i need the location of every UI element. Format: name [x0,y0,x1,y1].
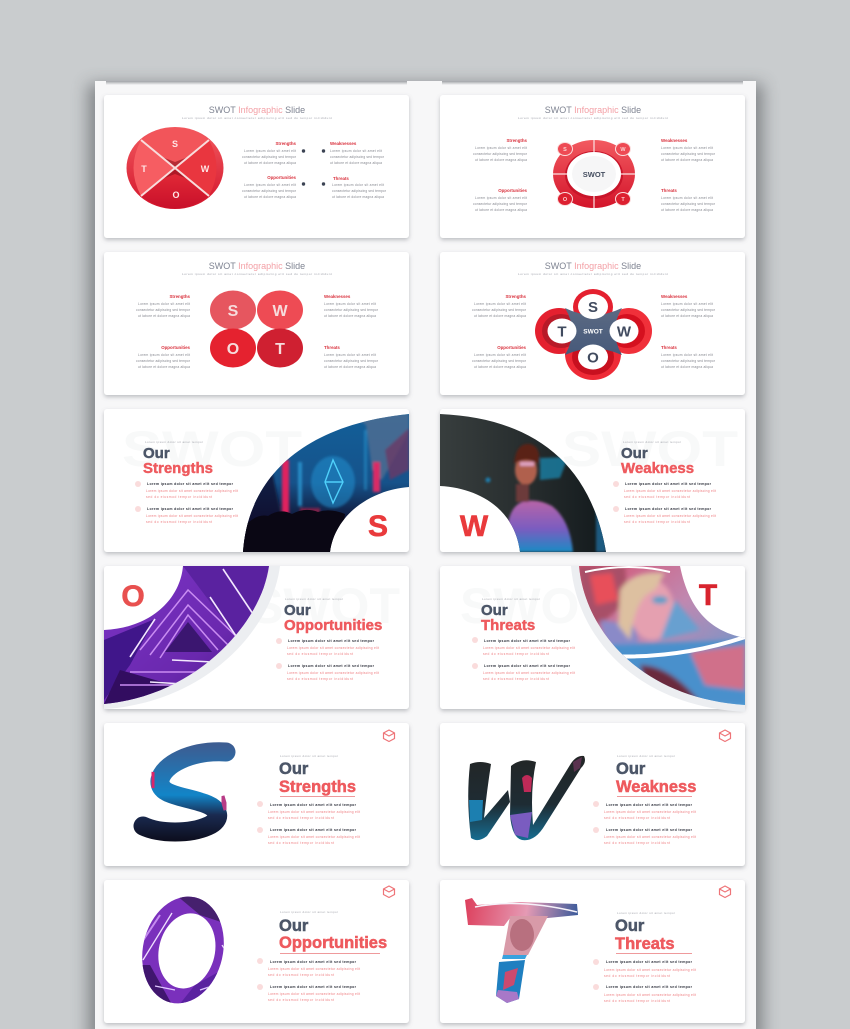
photo: purple neon tunnel [100,562,272,707]
heading: Weakness [621,460,694,477]
text block: threats [661,188,716,212]
pie chart [126,127,224,209]
text block: opportunities: Lorem ipsum dolor sit amet elit [475,196,527,200]
bullet two: Lorem ipsum dolor sit amet consectetur adipiscing elit [624,514,716,518]
bullet one [257,958,360,977]
clover diagram: W [617,324,632,340]
bullet two: sed do eiusmod tempor incididunt [483,677,549,681]
bullet two: sed do eiusmod tempor incididunt [604,841,670,845]
heading: Our [279,760,309,778]
text block: weaknesses: consectetur adipiscing sed tempor [661,308,716,312]
text block: threats: Threats [324,345,340,350]
panel: brush O opportunities slide [104,880,409,1023]
bullet one: sed do eiusmod tempor incididunt [483,652,549,656]
ring diagram: SWOT [583,170,606,179]
ring diagram: O [563,197,568,203]
four circles diagram: W [272,303,288,320]
bullet two [257,984,360,1002]
bullet one: Lorem ipsum dolor sit amet elit sed tempor [606,960,693,964]
heading: Our [143,445,170,462]
clover diagram: S [588,299,598,316]
brush letter W [468,756,585,840]
text block: threats [324,345,379,369]
ring diagram: W [620,147,626,153]
title: SWOT Infographic Slide [545,105,641,115]
pie chart: S [172,139,178,149]
bullet two: sed do eiusmod tempor incididunt [268,998,334,1002]
panel: SWOT ring slide [440,95,745,238]
text block: weaknesses: consectetur adipiscing sed tempor [661,152,716,156]
brush letter O [142,896,224,1004]
text block: opportunities: consectetur adipiscing sed tempor [136,359,191,363]
photo: neon club [240,410,410,555]
photo ring [104,566,280,709]
text block: opportunities: ut labore et dolore magna aliqua [475,208,527,212]
heading [615,917,675,953]
brush letter S [143,745,228,832]
bullet two: Lorem ipsum dolor sit amet elit sed tempor [147,507,234,511]
bullet one [472,637,575,656]
text block: threats: Threats [661,188,677,193]
connector dots [302,149,325,186]
pie chart: O [172,190,180,200]
text block: threats: consectetur adipiscing sed tempor [332,189,387,193]
text block: strengths: Lorem ipsum dolor sit amet elit [474,302,526,306]
text block: weaknesses: Weaknesses [661,294,688,299]
watermark: SWOT [250,578,400,634]
heading: Our [616,760,646,778]
text block: threats: consectetur adipiscing sed tempor [661,359,716,363]
bullet two [135,506,238,524]
ring diagram [553,140,635,208]
text block: weaknesses: Weaknesses [330,141,357,146]
bullet two [472,663,575,681]
text block: strengths: consectetur adipiscing sed tempor [473,152,528,156]
bullet two: Lorem ipsum dolor sit amet consectetur adipiscing elit [268,835,360,839]
icon: cube badge [384,886,394,898]
bullet one: Lorem ipsum dolor sit amet consectetur adipiscing elit [604,810,696,814]
bullet one: Lorem ipsum dolor sit amet consectetur adipiscing elit [604,968,696,972]
photo: man portrait [438,410,608,555]
heading: Threats [615,935,675,953]
bullet two: Lorem ipsum dolor sit amet consectetur adipiscing elit [604,835,696,839]
panel: SWOT pie slide [104,95,409,238]
underline [280,796,355,797]
heading: Our [284,602,311,619]
text block: threats: ut labore et dolore magna aliqua [661,365,713,369]
four circles diagram: S [228,303,239,320]
watermark: SWOT [460,578,610,634]
panel: SWOT four circles slide [104,252,409,395]
bullet two: Lorem ipsum dolor sit amet consectetur adipiscing elit [268,992,360,996]
small label: Lorem ipsum dolor sit amet tempor [617,911,675,915]
clover diagram: O [587,350,599,366]
panel: brush T threats slide [440,880,745,1023]
brush letter T [465,898,578,1003]
bullet one: sed do eiusmod tempor incididunt [287,652,353,656]
photo ring [571,566,745,712]
bullet one: Lorem ipsum dolor sit amet elit sed tempor [606,803,693,807]
small label: Lorem ipsum dolor sit amet tempor [617,754,675,758]
text block: opportunities: Opportunities [267,175,297,180]
text block: strengths: Strengths [506,138,528,143]
text block: strengths [136,294,191,318]
white page sheet [88,81,763,1029]
heading [284,602,382,634]
heading: Strengths [143,460,213,477]
text block: weaknesses [330,141,385,165]
heading [481,602,535,634]
text block: threats: Lorem ipsum dolor sit amet elit [661,196,713,200]
text block: opportunities: Lorem ipsum dolor sit amet elit [474,353,526,357]
bullet two: Lorem ipsum dolor sit amet elit sed tempor [484,664,571,668]
bullet one [276,638,379,656]
subtitle: Lorem ipsum dolor sit amet consectetur adipiscing elit sed do tempor incididunt [182,116,332,120]
underline [616,953,692,954]
bullet two: Lorem ipsum dolor sit amet elit sed tempor [270,828,357,832]
bullet two: sed do eiusmod tempor incididunt [268,841,334,845]
heading [621,445,694,477]
bullet one: Lorem ipsum dolor sit amet elit sed tempor [270,960,357,964]
text block: strengths: ut labore et dolore magna aliqua [475,158,527,162]
text block: strengths: Strengths [506,294,527,299]
text block: threats: Lorem ipsum dolor sit amet elit [661,353,713,357]
subtitle: Lorem ipsum dolor sit amet consectetur adipiscing elit sed do tempor incididunt [182,272,332,276]
title: SWOT Infographic Slide [209,261,305,271]
text block: threats [661,345,716,369]
letter W: W [460,510,489,543]
text block: weaknesses: ut labore et dolore magna aliqua [324,314,376,318]
text block: opportunities: ut labore et dolore magna aliqua [474,365,526,369]
text block: strengths [473,138,528,162]
bullet two [593,984,696,1003]
text block: threats: Lorem ipsum dolor sit amet elit [332,183,384,187]
text block: opportunities [472,345,527,369]
bullet one [613,481,716,499]
title: SWOT Infographic Slide [545,261,641,271]
icon: cube badge [720,730,730,742]
bullet one: Lorem ipsum dolor sit amet consectetur adipiscing elit [268,810,360,814]
text block: opportunities [473,188,528,212]
text block: strengths: Strengths [276,141,297,146]
small label: Lorem ipsum dolor sit amet tempor [280,910,338,914]
bullet two [276,663,379,681]
text block: weaknesses: Weaknesses [324,294,351,299]
bullet two: sed do eiusmod tempor incididunt [604,999,670,1003]
text block: weaknesses: Lorem ipsum dolor sit amet elit [324,302,376,306]
bullet two: sed do eiusmod tempor incididunt [624,520,690,524]
heading: Our [279,917,309,935]
text block: threats: consectetur adipiscing sed tempor [661,202,716,206]
text block: weaknesses: ut labore et dolore magna aliqua [330,161,382,165]
letter T: T [699,579,717,612]
text block: threats: ut labore et dolore magna aliqua [324,365,376,369]
heading: Opportunities [279,934,387,952]
text block: weaknesses [661,138,716,162]
text block: opportunities: Lorem ipsum dolor sit amet elit [138,353,190,357]
panel: brush S strengths slide [104,723,409,866]
text block: weaknesses: ut labore et dolore magna aliqua [661,314,713,318]
text block: opportunities [242,175,297,199]
heading [143,445,213,477]
ring diagram: S [563,147,567,153]
four circles diagram: O [227,341,239,358]
panel: brush W weakness slide [440,723,745,866]
letter O: O [121,580,145,613]
text block: strengths [242,141,297,165]
underline [617,796,692,797]
text block: strengths: consectetur adipiscing sed tempor [472,308,527,312]
title: SWOT Infographic Slide [209,105,305,115]
heading: Weakness [616,778,696,796]
bullet two: Lorem ipsum dolor sit amet consectetur adipiscing elit [287,671,379,675]
text block: opportunities: Lorem ipsum dolor sit amet elit [244,183,296,187]
bullet one: Lorem ipsum dolor sit amet elit sed tempor [147,482,234,486]
bullet one: sed do eiusmod tempor incididunt [604,816,670,820]
text block: strengths: ut labore et dolore magna aliqua [138,314,190,318]
text block: weaknesses [324,294,379,318]
bullet one: sed do eiusmod tempor incididunt [268,973,334,977]
text block: strengths: Lorem ipsum dolor sit amet elit [244,149,296,153]
panel: our threats photo slide [440,562,747,712]
text block: threats [332,176,387,199]
bullet two: sed do eiusmod tempor incididunt [146,520,212,524]
panel: our weakness photo slide [438,409,745,555]
ring diagram: T [621,197,625,203]
pie chart: T [141,164,147,174]
heading: Threats [481,617,535,634]
text block: opportunities: consectetur adipiscing sed tempor [472,359,527,363]
watermark: SWOT [562,421,738,477]
heading: Our [481,602,508,619]
watermark: SWOT [122,421,302,477]
bullet two: Lorem ipsum dolor sit amet elit sed tempor [288,664,375,668]
text block: threats: consectetur adipiscing sed tempor [324,359,379,363]
small label: Lorem ipsum dolor sit amet tempor [623,440,681,444]
text block: strengths: Strengths [170,294,191,299]
text block: weaknesses: ut labore et dolore magna aliqua [661,158,713,162]
bullet one: Lorem ipsum dolor sit amet elit sed tempor [484,639,571,643]
bullet two: sed do eiusmod tempor incididunt [287,677,353,681]
bullet one [593,801,696,820]
text block: opportunities: consectetur adipiscing sed tempor [242,189,297,193]
bullet one: sed do eiusmod tempor incididunt [624,495,690,499]
text block: weaknesses [661,294,716,318]
bullet two: Lorem ipsum dolor sit amet elit sed tempor [606,828,693,832]
bullet one [257,801,360,820]
heading: Our [621,445,648,462]
subtitle: Lorem ipsum dolor sit amet consectetur adipiscing elit sed do tempor incididunt [518,116,668,120]
text block: strengths [472,294,527,318]
bullet one: Lorem ipsum dolor sit amet consectetur adipiscing elit [268,967,360,971]
pie chart: W [201,164,210,174]
panel: our opportunities photo slide [100,562,409,709]
text block: opportunities: consectetur adipiscing sed tempor [473,202,528,206]
text block: strengths: ut labore et dolore magna aliqua [244,161,296,165]
bullet one: sed do eiusmod tempor incididunt [146,495,212,499]
text block: opportunities: Opportunities [161,345,191,350]
subtitle: Lorem ipsum dolor sit amet consectetur adipiscing elit sed do tempor incididunt [518,272,668,276]
text block: threats: Threats [333,176,349,181]
text block: strengths: Lorem ipsum dolor sit amet elit [475,146,527,150]
bullet two: Lorem ipsum dolor sit amet consectetur adipiscing elit [483,671,575,675]
text block: threats: Lorem ipsum dolor sit amet elit [324,353,376,357]
bullet one: Lorem ipsum dolor sit amet elit sed tempor [625,482,712,486]
text block: opportunities: Opportunities [497,345,527,350]
bullet two [613,506,716,524]
text block: strengths: consectetur adipiscing sed tempor [136,308,191,312]
bullet one: Lorem ipsum dolor sit amet consectetur adipiscing elit [483,646,575,650]
text block: threats: ut labore et dolore magna aliqua [332,195,384,199]
text block: weaknesses: Lorem ipsum dolor sit amet elit [661,146,713,150]
photo: woman portrait [575,562,747,708]
text block: opportunities [136,345,191,369]
text block: opportunities: ut labore et dolore magna aliqua [244,195,296,199]
heading [616,760,696,796]
heading [279,760,356,796]
four circles diagram: T [275,341,285,358]
bullet two [593,827,696,845]
heading: Our [615,917,645,935]
bullet one: sed do eiusmod tempor incididunt [604,974,670,978]
bullet one: Lorem ipsum dolor sit amet consectetur adipiscing elit [287,646,379,650]
bullet one: Lorem ipsum dolor sit amet consectetur adipiscing elit [624,489,716,493]
text block: opportunities: ut labore et dolore magna aliqua [138,365,190,369]
text block: weaknesses: Lorem ipsum dolor sit amet elit [661,302,713,306]
clover diagram [535,289,652,380]
letter S: S [368,510,388,543]
text block: threats: ut labore et dolore magna aliqua [661,208,713,212]
text block: strengths: ut labore et dolore magna aliqua [474,314,526,318]
icon: cube badge [384,730,394,742]
bullet one: Lorem ipsum dolor sit amet elit sed tempor [270,803,357,807]
small label: Lorem ipsum dolor sit amet tempor [145,440,203,444]
text block: weaknesses: consectetur adipiscing sed tempor [330,155,385,159]
bullet one: Lorem ipsum dolor sit amet consectetur adipiscing elit [146,489,238,493]
text block: strengths: Lorem ipsum dolor sit amet elit [138,302,190,306]
four circles diagram [210,290,303,368]
heading: Opportunities [284,617,382,634]
text block: opportunities: Opportunities [498,188,528,193]
text block: threats: Threats [661,345,677,350]
icon: cube badge [720,886,730,898]
bullet one: sed do eiusmod tempor incididunt [268,816,334,820]
bullet one [593,959,696,978]
bullet two: Lorem ipsum dolor sit amet elit sed tempor [270,985,357,989]
clover diagram: SWOT [583,328,603,336]
small label: Lorem ipsum dolor sit amet tempor [285,597,343,601]
bullet two: Lorem ipsum dolor sit amet elit sed tempor [606,985,693,989]
bullet two [257,827,360,845]
heading: Strengths [279,778,356,796]
panel: our strengths photo slide [104,409,410,555]
panel: SWOT clover slide [440,252,745,395]
clover diagram: T [557,324,567,340]
bullet two: Lorem ipsum dolor sit amet elit sed tempor [625,507,712,511]
heading [279,917,387,952]
bullet two: Lorem ipsum dolor sit amet consectetur adipiscing elit [604,993,696,997]
text block: weaknesses: Lorem ipsum dolor sit amet elit [330,149,382,153]
underline [280,953,380,954]
text block: weaknesses: Weaknesses [661,138,688,143]
small label: Lorem ipsum dolor sit amet tempor [280,754,338,758]
bullet one [135,481,238,499]
small label: Lorem ipsum dolor sit amet tempor [482,597,540,601]
text block: strengths: consectetur adipiscing sed tempor [242,155,297,159]
bullet one: Lorem ipsum dolor sit amet elit sed tempor [288,639,375,643]
text block: weaknesses: consectetur adipiscing sed tempor [324,308,379,312]
bullet two: Lorem ipsum dolor sit amet consectetur adipiscing elit [146,514,238,518]
